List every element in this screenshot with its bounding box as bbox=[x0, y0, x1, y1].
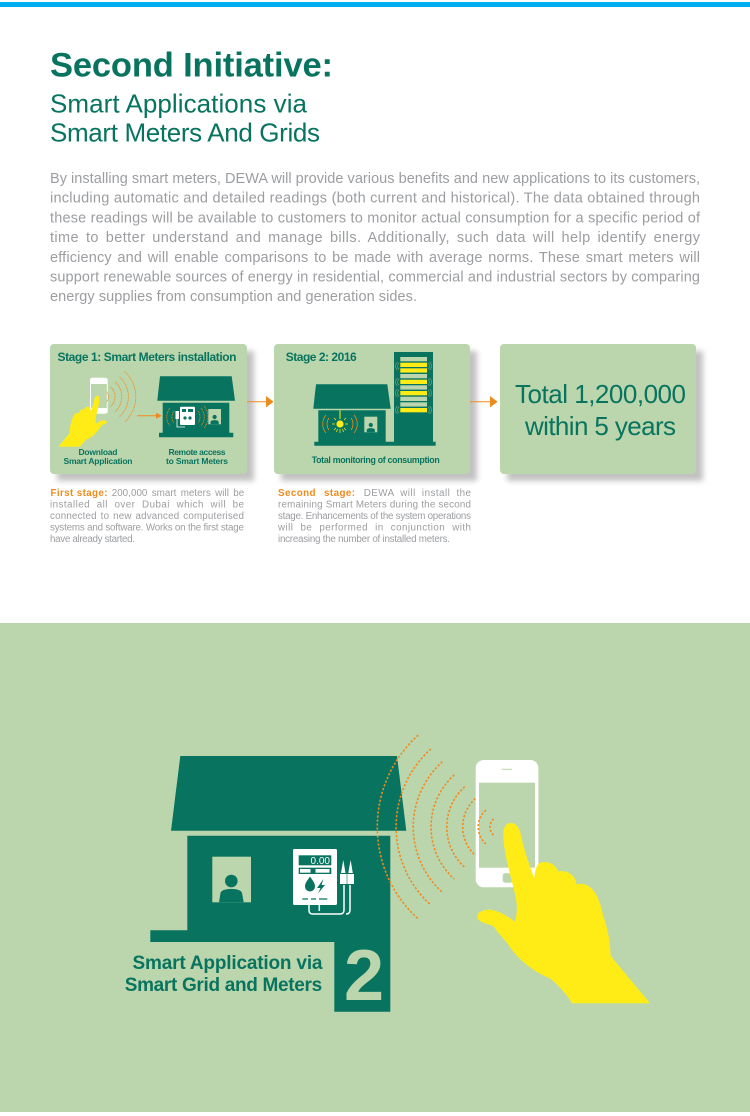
arrow: stage 2 to total bbox=[470, 396, 498, 407]
house body bbox=[150, 836, 390, 1012]
number 2: 2 bbox=[344, 936, 384, 1016]
panel: lower illustration background bbox=[0, 623, 750, 1112]
panel: stage 2 bbox=[274, 344, 477, 481]
intro text block: energy supplies from consumption and generation sides. bbox=[50, 289, 417, 305]
intro text block: including automatic and detailed readings (both current and historical). The data obtained through bbox=[50, 191, 700, 207]
title: Smart Meters And Grids bbox=[50, 118, 320, 148]
stage 1 captions bbox=[64, 447, 228, 466]
first stage text: First stage: bbox=[50, 488, 108, 499]
panel: total bbox=[500, 344, 703, 481]
total figure: within 5 years bbox=[524, 411, 676, 441]
arrow: stage 1 to stage 2 bbox=[247, 396, 274, 407]
stage 1 heading: Stage 1: Smart Meters installation bbox=[58, 350, 236, 364]
icon: phone with hand bbox=[58, 371, 136, 447]
arrow: phone to house bbox=[137, 413, 162, 419]
illustration: large house bbox=[125, 756, 406, 1016]
second stage text bbox=[277, 488, 472, 545]
icon: yellow hand bbox=[477, 823, 650, 1003]
first stage text: 200,000 smart meters will be bbox=[112, 488, 245, 499]
stage 1 captions: Remote access bbox=[168, 447, 226, 457]
icon: smart meter: 0.00 bbox=[311, 856, 330, 867]
stage 2 heading: Stage 2: 2016 bbox=[286, 350, 357, 364]
top bar bbox=[0, 2, 750, 7]
stage 1 captions: to Smart Meters bbox=[166, 456, 228, 466]
intro text block: these readings will be available to customers to monitor actual consumption for a specific period of bbox=[50, 210, 701, 226]
first stage text: systems and software. Works on the first stage bbox=[50, 523, 245, 534]
section label bbox=[125, 953, 323, 996]
title: Smart Applications via bbox=[50, 89, 308, 119]
house roof bbox=[171, 756, 406, 831]
section label: Smart Grid and Meters bbox=[125, 975, 322, 996]
first stage text: installed all over Dubai which will be bbox=[50, 500, 245, 511]
icon: house with light bulb bbox=[313, 384, 436, 446]
second stage text: Second stage: bbox=[278, 488, 355, 499]
total figure: Total 1,200,000 bbox=[515, 379, 686, 409]
intro text block: time to better understand and manage bills. Additionally, such data will help identify energy bbox=[50, 230, 701, 246]
icon: smart meter bbox=[293, 849, 354, 914]
icon: smartphone bbox=[476, 760, 538, 887]
window with person bbox=[212, 857, 251, 902]
intro text block: efficiency and will enable comparisons to be made with average norms. These smart meters will bbox=[50, 250, 700, 266]
stage 1 captions: Smart Application bbox=[64, 456, 132, 466]
total figure bbox=[515, 379, 686, 441]
second stage text: remaining Smart Meters during the second bbox=[278, 500, 471, 511]
title: Second Initiative: bbox=[50, 47, 333, 85]
first stage text bbox=[50, 488, 245, 545]
first stage text: have already started. bbox=[50, 534, 135, 545]
stage 1 captions: Download bbox=[78, 447, 118, 457]
intro text block: support renewable sources of energy in residential, commercial and industrial sectors by comparing bbox=[50, 270, 700, 286]
intro text block: By installing smart meters, DEWA will provide various benefits and new applications to its customers, bbox=[50, 171, 700, 187]
icon: tower block bbox=[394, 352, 433, 442]
panel: stage 1 bbox=[50, 344, 254, 481]
second stage text: will be performed in conjunction with bbox=[277, 523, 471, 534]
first stage text: connected to new advanced computerised bbox=[50, 511, 244, 522]
second stage text: DEWA will install the bbox=[364, 488, 472, 499]
signal arcs bbox=[377, 735, 475, 919]
icon: house with smart meter bbox=[157, 376, 235, 437]
intro text block bbox=[50, 171, 701, 305]
second stage text: stage. Enhancements of the system operations bbox=[278, 511, 471, 522]
stage 2 caption: Total monitoring of consumption bbox=[312, 455, 440, 465]
title bbox=[50, 47, 333, 148]
section label: Smart Application via bbox=[132, 953, 323, 974]
second stage text: increasing the number of installed meters. bbox=[278, 534, 450, 545]
